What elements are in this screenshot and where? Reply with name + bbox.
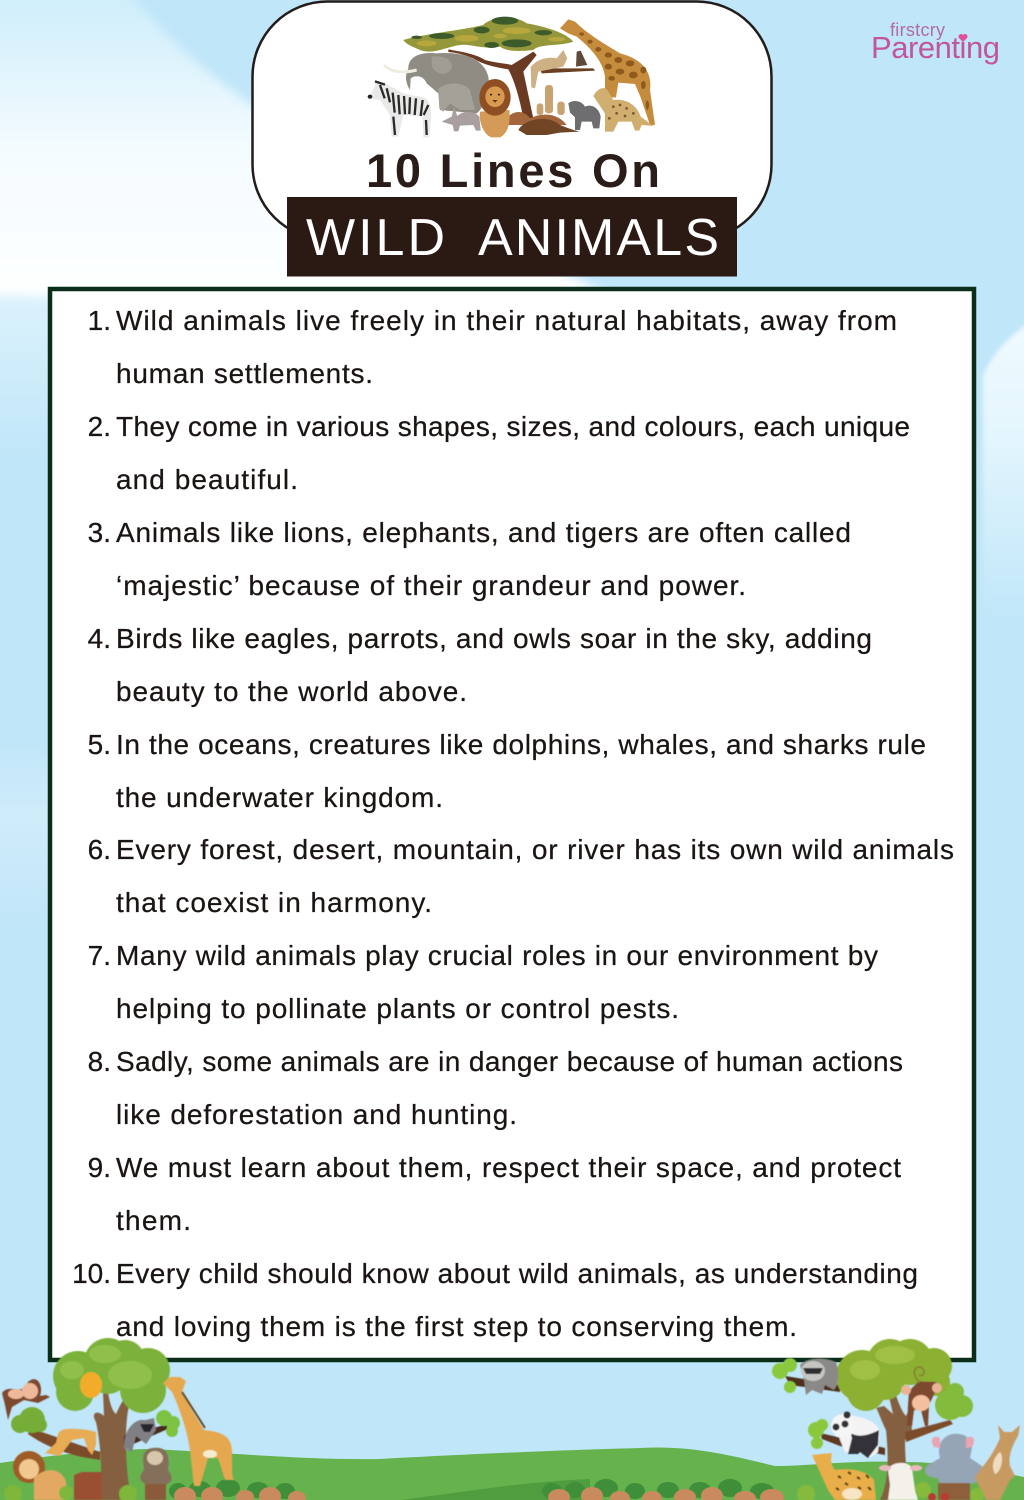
sloth [140, 1448, 172, 1500]
panda [831, 1412, 880, 1458]
line 2: and beautiful. [116, 464, 298, 495]
right tree trunk [876, 1392, 912, 1500]
bottom shrub row [169, 1479, 784, 1500]
cheetah [812, 1453, 876, 1500]
line 4 [88, 623, 872, 707]
right canopy [836, 1339, 952, 1411]
left branch right [124, 1424, 170, 1448]
logo: FirstCry Parenting [871, 20, 1000, 65]
line 6: that coexist in harmony. [116, 887, 432, 918]
content panel [50, 289, 974, 1360]
logo word: Parenting: Parenting [871, 30, 1000, 65]
leaves upper [772, 1358, 797, 1393]
stump [938, 1483, 970, 1500]
zebra [368, 81, 431, 137]
line 6: 6. [88, 834, 111, 865]
line 10: 10. [72, 1258, 111, 1289]
lion [479, 79, 511, 137]
banner text: WILD ANIMALS: WILD [306, 209, 445, 267]
line 1: 1. [88, 305, 111, 336]
line 5: 5. [88, 729, 111, 760]
title pill [252, 2, 772, 240]
line 3: ‘majestic’ because of their grandeur and power. [116, 570, 746, 601]
right branch [905, 1420, 953, 1442]
pangolin [518, 119, 580, 135]
title line: 10 Lines On: 10 Lines On [366, 144, 660, 197]
line 4: beauty to the world above. [116, 676, 467, 707]
left branch [28, 1428, 100, 1460]
line 1 [88, 305, 897, 389]
raccoon [800, 1358, 838, 1395]
line 10 [72, 1258, 918, 1342]
line 7: 7. [88, 940, 111, 971]
line 7: Many wild animals play crucial roles in our environment by [116, 940, 878, 971]
line 2: 2. [88, 411, 111, 442]
small bush [11, 1407, 47, 1433]
line 1: Wild animals live freely in their natural habitats, away from [116, 305, 897, 336]
banner text: WILD ANIMALS: ANIMALS [478, 209, 719, 267]
lamb [879, 1463, 922, 1500]
cloud: right side [983, 315, 1024, 640]
leopard on ledge [531, 50, 595, 88]
line 4: Birds like eagles, parrots, and owls soar in the sky, adding [116, 623, 872, 654]
line 8 [88, 1046, 903, 1130]
monkey [901, 1381, 942, 1426]
line 3: 3. [88, 517, 111, 548]
panda branch [820, 1433, 885, 1455]
left bushes [4, 1485, 137, 1500]
line 8: like deforestation and hunting. [116, 1099, 517, 1130]
mushrooms [928, 1493, 949, 1500]
cheetah [593, 88, 653, 132]
line 6: Every forest, desert, mountain, or river has its own wild animals [116, 834, 954, 865]
line 3: Animals like lions, elephants, and tigers are often called [116, 517, 851, 548]
right bushes [797, 1482, 984, 1500]
line 4: 4. [88, 623, 111, 654]
meerkats [537, 85, 565, 115]
left tree trunk [94, 1392, 132, 1500]
title banner [287, 197, 737, 276]
fox [74, 1472, 102, 1500]
warthog [568, 101, 601, 130]
line 8: 8. [88, 1046, 111, 1077]
line 7 [88, 940, 878, 1024]
giraffe [560, 19, 655, 125]
line 2 [88, 411, 910, 495]
right animal scene [772, 1339, 1020, 1500]
beehive [80, 1372, 102, 1398]
line 2: They come in various shapes, sizes, and colours, each unique [116, 411, 910, 442]
light band in left sky [0, 740, 50, 930]
line 7: helping to pollinate plants or control pests. [116, 993, 679, 1024]
hill shadow [400, 1479, 590, 1500]
line 10: and loving them is the first step to conserving them. [116, 1311, 797, 1342]
panda leaves [808, 1419, 828, 1449]
line 3 [88, 517, 851, 601]
line 1: human settlements. [116, 358, 373, 389]
tree leaves [156, 1410, 180, 1437]
line 5 [88, 729, 926, 813]
left animal scene [2, 1338, 234, 1500]
pale sky under left cloud [0, 288, 50, 460]
elephant [384, 53, 489, 113]
upper branch [785, 1376, 840, 1392]
kangaroo [975, 1425, 1020, 1500]
line 5: the underwater kingdom. [116, 782, 443, 813]
raccoon [124, 1418, 156, 1452]
numbered list of ten lines [72, 305, 954, 1342]
logo heart [959, 34, 968, 42]
left canopy [53, 1338, 170, 1413]
monkey tail [914, 1367, 924, 1383]
lion [13, 1451, 68, 1500]
cloud: upper left [0, 0, 620, 300]
elephant [925, 1434, 983, 1484]
line 9 [88, 1152, 901, 1236]
line 5: In the oceans, creatures like dolphins, whales, and sharks rule [116, 729, 926, 760]
green hill [0, 1447, 1024, 1500]
side bush [935, 1383, 973, 1420]
acacia canopy [403, 17, 573, 52]
illustration: safari animals [368, 17, 655, 137]
line 9: them. [116, 1205, 191, 1236]
leopard on branch [45, 1429, 96, 1456]
aardvark [442, 107, 481, 131]
line 10: Every child should know about wild animals, as understanding [116, 1258, 918, 1289]
line 9: 9. [88, 1152, 111, 1183]
line 8: Sadly, some animals are in danger because of human actions [116, 1046, 903, 1077]
logo word: firstcry: firstcry [890, 20, 945, 40]
banner text: WILD ANIMALS [306, 209, 719, 267]
rocks [503, 112, 567, 125]
monkey [2, 1379, 50, 1420]
acacia trunk and branches [448, 49, 537, 118]
line 6 [88, 834, 954, 918]
giraffe [163, 1377, 234, 1486]
line 9: We must learn about them, respect their space, and protect [116, 1152, 901, 1183]
